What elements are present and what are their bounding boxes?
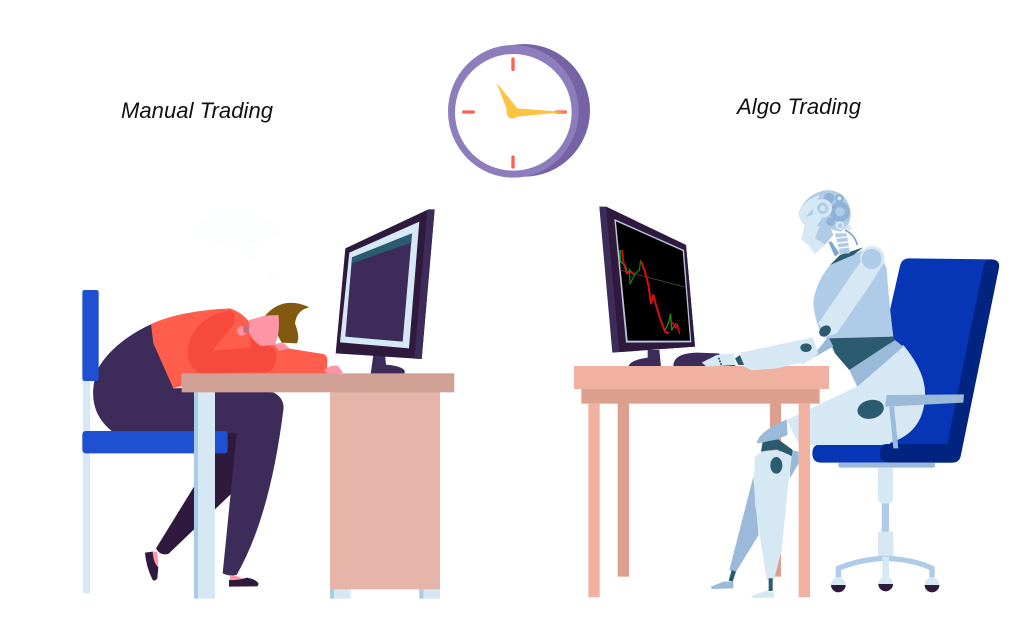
chair: seat [82, 431, 228, 453]
desk: drawer unit [330, 390, 440, 599]
person: trousers [93, 324, 284, 576]
robot: knee joint [757, 419, 793, 456]
robot: gears [813, 193, 851, 231]
faint thought bubble [193, 213, 280, 281]
desk: front legs [588, 404, 810, 597]
monitor: frame [599, 207, 695, 353]
person: ear and neck [237, 326, 250, 336]
monitor: stand [371, 355, 405, 374]
desk: top [182, 373, 454, 392]
robot: thigh [787, 345, 925, 447]
robot: torso [813, 247, 903, 387]
robot: skull [798, 190, 851, 232]
robot: rear leg [711, 450, 799, 589]
person: fingers [324, 365, 343, 374]
chair: pedestal [831, 463, 939, 592]
robot: face [798, 195, 832, 254]
desk: lower rail [581, 387, 820, 404]
chair: armrest [885, 394, 964, 448]
robot: neck [828, 230, 857, 257]
robot: head [798, 190, 857, 257]
robot: forearm and hand [702, 323, 833, 370]
title: Manual Trading: Manual Trading [121, 98, 274, 123]
person: head [249, 315, 279, 346]
desk: top [574, 366, 829, 389]
person: rear leg [156, 432, 238, 554]
robot: front shin [751, 450, 792, 598]
manual trader scene [82, 209, 454, 599]
chair: dark side panel [880, 259, 999, 463]
robot: upper arm [818, 246, 885, 337]
title: Algo Trading: Algo Trading [735, 94, 862, 119]
person: sweater [151, 308, 327, 388]
robot: temple slash [806, 208, 813, 217]
chair: back and seat [812, 258, 999, 463]
person: hand [273, 343, 289, 351]
chart: price candles [620, 250, 685, 334]
chair: back and post [83, 380, 90, 593]
robot: cheek plate [815, 227, 833, 244]
person: hair [265, 303, 309, 343]
person: sweater fold [187, 311, 277, 373]
chair: back rest [82, 290, 99, 381]
person: rear shoe [145, 552, 158, 581]
robot: hip joint [856, 397, 886, 421]
desk: rear legs [618, 400, 781, 577]
algo trader scene [574, 190, 999, 598]
monitor: stand and keyboard [628, 350, 737, 367]
icon: wall clock [448, 44, 590, 178]
monitor: frame [336, 209, 435, 359]
desk: leg [194, 390, 215, 599]
person: front shoe [229, 575, 259, 587]
